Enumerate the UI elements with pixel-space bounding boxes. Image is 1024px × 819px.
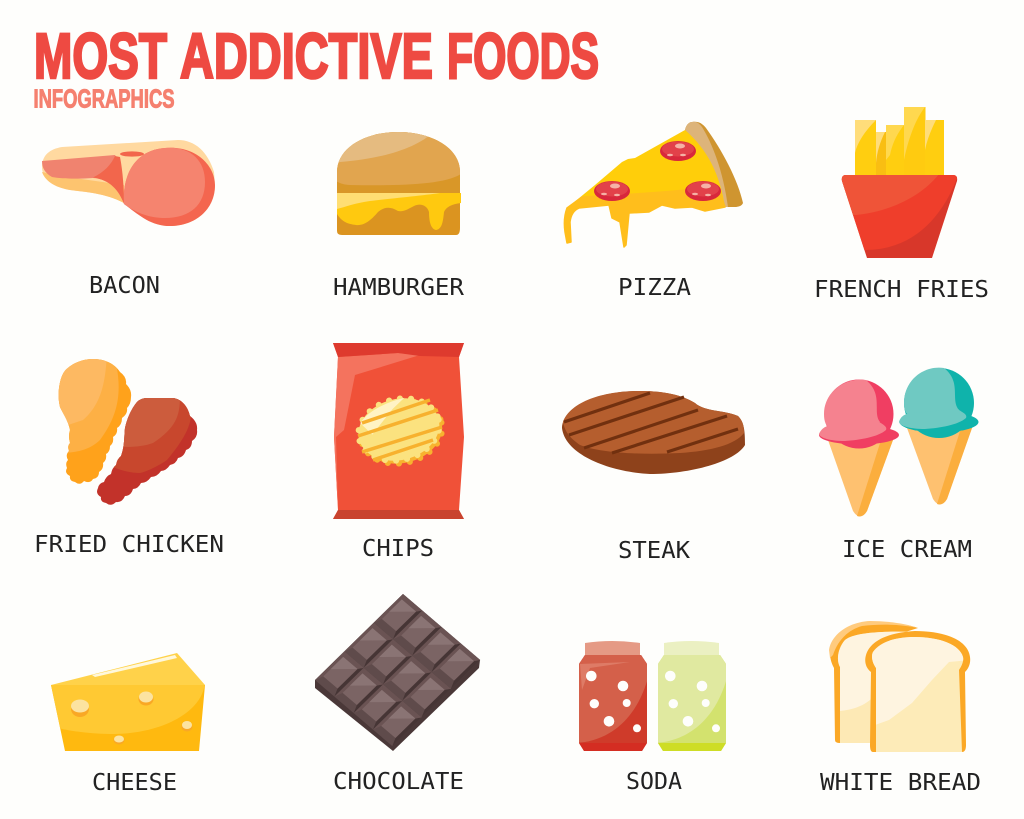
label: french fries: FRENCH FRIES <box>814 275 989 303</box>
label: chips: CHIPS <box>362 534 434 562</box>
icon: pizza <box>564 122 743 247</box>
panel: french fries <box>814 107 989 303</box>
subtitle: INFOGRAPHICS <box>34 84 174 114</box>
icon: hamburger <box>337 132 461 235</box>
icon: white bread slices <box>829 621 970 752</box>
title: ADDICTIVE <box>180 20 433 92</box>
label: fried chicken: FRIED CHICKEN <box>34 530 224 558</box>
title: MOST <box>34 20 167 92</box>
panel: fried chicken <box>34 350 224 558</box>
icon: fried chicken <box>58 359 198 505</box>
icon: green soda can <box>658 641 726 751</box>
icon: red soda can <box>579 641 647 751</box>
panel: white bread <box>820 621 981 796</box>
panel: chocolate <box>315 594 480 795</box>
panel: pizza <box>564 122 743 301</box>
panel: cheese <box>45 653 205 796</box>
label: steak: STEAK <box>618 536 691 564</box>
panel: bacon <box>42 140 215 299</box>
title <box>34 20 599 92</box>
panel: soda <box>575 641 730 795</box>
panel: hamburger <box>334 132 464 296</box>
label: chocolate: CHOCOLATE <box>333 767 464 795</box>
label: bacon: BACON <box>89 271 160 299</box>
icon: french fries <box>835 107 960 258</box>
label: soda: SODA <box>626 767 682 795</box>
label: ice cream: ICE CREAM <box>842 535 972 563</box>
chip <box>352 390 449 472</box>
icon: steak <box>562 391 745 474</box>
icon: cheese wedge <box>45 653 205 751</box>
label: pizza: PIZZA <box>618 273 691 301</box>
icon: ice cream cones <box>819 368 978 516</box>
label: cheese: CHEESE <box>92 768 177 796</box>
icon: bacon <box>42 140 215 226</box>
label: hamburger: HAMBURGER <box>333 273 465 301</box>
icon: chips bag <box>333 343 464 519</box>
icon: chocolate bar <box>315 594 480 751</box>
panel: chips <box>333 343 464 562</box>
title: FOODS <box>447 20 599 92</box>
label: white bread: WHITE BREAD <box>820 768 981 796</box>
panel: ice cream <box>819 368 978 563</box>
panel: steak <box>562 391 745 564</box>
